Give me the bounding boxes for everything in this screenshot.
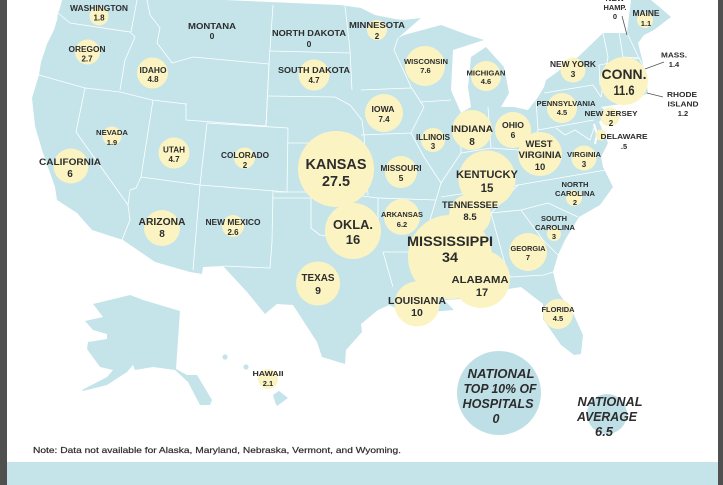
state: Indiana bbox=[451, 110, 493, 150]
state: Minnesota: 2 bbox=[375, 32, 380, 41]
state: Mississippi label: MISSISSIPPI bbox=[407, 234, 493, 249]
state: Virginia: VIRGINIA bbox=[567, 150, 602, 159]
callout: national average: AVERAGE bbox=[576, 410, 638, 424]
state: Washington bbox=[70, 4, 128, 26]
state: Oregon: OREGON bbox=[68, 45, 106, 54]
state: Virginia bbox=[567, 146, 602, 170]
state: New York: NEW YORK bbox=[550, 59, 597, 69]
state: Minnesota: MINNESOTA bbox=[349, 21, 405, 30]
bubble: Kentucky bbox=[458, 150, 516, 208]
state: Arizona: ARIZONA bbox=[138, 217, 186, 228]
state: North Carolina bbox=[555, 180, 596, 207]
state: Indiana: INDIANA bbox=[451, 124, 493, 135]
state: Georgia bbox=[509, 233, 547, 271]
state: Rhode Island with leader line bbox=[647, 90, 699, 118]
state: Utah: 4.7 bbox=[168, 155, 180, 164]
state: Texas bbox=[296, 262, 340, 306]
state: Colorado bbox=[221, 148, 269, 170]
state: North Dakota: NORTH DAKOTA bbox=[272, 29, 346, 38]
state: Delaware bbox=[596, 130, 648, 151]
state: New York: 3 bbox=[571, 69, 576, 79]
state: Arkansas: ARKANSAS bbox=[381, 210, 423, 219]
state: Florida: FLORIDA bbox=[542, 305, 575, 314]
state: Kentucky label: 15 bbox=[481, 183, 494, 195]
bubble: Oklahoma bbox=[325, 203, 381, 259]
map of Hawaii bbox=[222, 354, 288, 406]
state: Arkansas: 6.2 bbox=[397, 220, 407, 229]
state: Rhode Island with leader line: 1.2 bbox=[678, 109, 688, 118]
state: New Hampshire with leader line: 0 bbox=[613, 12, 617, 21]
state: California bbox=[39, 148, 101, 184]
state: Arkansas bbox=[381, 199, 423, 235]
state: Nevada: 1.9 bbox=[107, 138, 117, 147]
state: Florida bbox=[542, 299, 575, 329]
state: West Virginia bbox=[518, 132, 562, 176]
callout: national top 10% of hospitals bbox=[457, 351, 541, 435]
state: Washington: WASHINGTON bbox=[70, 4, 128, 13]
state: Minnesota bbox=[349, 20, 405, 41]
state: Tennessee label bbox=[442, 200, 498, 223]
bubble: Mississippi bbox=[408, 215, 492, 299]
callout: national average bbox=[576, 394, 642, 439]
map of the contiguous United States bbox=[32, 0, 671, 364]
state: North Dakota bbox=[272, 29, 346, 49]
state: West Virginia: 10 bbox=[535, 162, 545, 173]
state: Kansas label: 27.5 bbox=[322, 173, 350, 190]
state: Kentucky label bbox=[456, 169, 519, 195]
state: Connecticut bbox=[600, 57, 648, 105]
state: Ohio: 6 bbox=[511, 130, 516, 140]
state: Ohio bbox=[495, 112, 531, 148]
state: Pennsylvania: PENNSYLVANIA bbox=[536, 99, 596, 108]
state: Georgia: 7 bbox=[526, 253, 530, 262]
state: Colorado: 2 bbox=[243, 161, 248, 170]
state: Maine: 1.1 bbox=[641, 19, 651, 28]
state: Hawaii: 2.1 bbox=[263, 379, 273, 388]
state: Kansas label: KANSAS bbox=[306, 156, 366, 173]
state: North Carolina: NORTH bbox=[562, 180, 588, 189]
state: Idaho: IDAHO bbox=[140, 66, 166, 75]
state: Connecticut: CONN. bbox=[602, 66, 646, 82]
state: New Mexico: NEW MEXICO bbox=[206, 218, 260, 227]
state: California: CALIFORNIA bbox=[39, 157, 101, 168]
state: North Dakota: 0 bbox=[307, 39, 312, 49]
state: Alabama label: ALABAMA bbox=[452, 274, 509, 286]
state: Louisiana label: 10 bbox=[411, 307, 423, 319]
state: Tennessee label: 8.5 bbox=[463, 212, 477, 223]
state: Idaho: 4.8 bbox=[147, 75, 159, 84]
state: Nevada bbox=[96, 126, 129, 147]
state: Texas: 9 bbox=[315, 285, 321, 297]
state: South Carolina: CAROLINA bbox=[535, 223, 576, 232]
state: Rhode Island with leader line: RHODE bbox=[667, 90, 697, 99]
state: Arizona: 8 bbox=[159, 229, 165, 240]
callout: national top 10% of hospitals: NATIONAL bbox=[468, 367, 534, 381]
map of Alaska bbox=[82, 295, 212, 405]
state: New Hampshire with leader line bbox=[604, 0, 627, 35]
state: Louisiana label: LOUISIANA bbox=[388, 296, 446, 307]
state: Ohio: OHIO bbox=[502, 121, 524, 130]
state: Montana: 0 bbox=[210, 31, 215, 41]
state: South Carolina: SOUTH bbox=[541, 214, 567, 223]
state: Wisconsin: 7.6 bbox=[420, 66, 431, 75]
state: Massachusetts with leader line: MASS. bbox=[661, 50, 687, 60]
state: Indiana: 8 bbox=[469, 137, 475, 148]
state: Alabama label bbox=[452, 274, 509, 299]
state: Iowa bbox=[365, 94, 403, 132]
state: Hawaii: HAWAII bbox=[252, 369, 284, 378]
state: Idaho bbox=[137, 58, 168, 88]
state: Oklahoma label: 16 bbox=[346, 232, 360, 247]
bubble: Alabama bbox=[452, 250, 510, 308]
state: Maine bbox=[632, 9, 660, 28]
bubble: Louisiana bbox=[394, 282, 440, 326]
state: Missouri: 5 bbox=[399, 173, 404, 183]
state: Iowa: 7.4 bbox=[378, 115, 390, 124]
state: Delaware: DELAWARE bbox=[600, 132, 648, 141]
state: Connecticut: 11.6 bbox=[614, 82, 635, 98]
state: Utah: UTAH bbox=[163, 146, 185, 154]
state: New Jersey: NEW JERSEY bbox=[584, 109, 638, 118]
state: Mississippi label bbox=[407, 234, 493, 265]
state: Oregon bbox=[68, 40, 106, 64]
state: Colorado: COLORADO bbox=[221, 151, 269, 160]
state: Wisconsin bbox=[404, 46, 448, 86]
state: Illinois bbox=[416, 128, 451, 152]
state: Illinois: ILLINOIS bbox=[416, 133, 451, 142]
state: South Carolina bbox=[535, 214, 576, 241]
state: Kansas label bbox=[306, 156, 366, 190]
state: California: 6 bbox=[67, 169, 73, 180]
state: North Carolina: 2 bbox=[573, 198, 577, 207]
bottom band bbox=[7, 462, 718, 485]
state: West Virginia: VIRGINIA bbox=[518, 150, 562, 160]
state: Nevada: NEVADA bbox=[96, 128, 129, 137]
state: Pennsylvania: 4.5 bbox=[557, 108, 567, 117]
state: South Dakota bbox=[278, 60, 350, 90]
state: West Virginia: WEST bbox=[526, 139, 553, 149]
state: South Carolina: 3 bbox=[552, 232, 556, 241]
left window edge bbox=[0, 0, 7, 485]
state: Massachusetts with leader line: 1.4 bbox=[669, 60, 680, 69]
state: Texas: TEXAS bbox=[302, 273, 335, 284]
state: Utah bbox=[158, 138, 190, 168]
state: Washington: 1.8 bbox=[93, 14, 105, 22]
callout: national top 10% of hospitals: TOP 10% OF bbox=[464, 382, 537, 396]
state: Florida: 4.5 bbox=[553, 314, 563, 323]
state: Michigan bbox=[466, 61, 506, 91]
state: Missouri bbox=[380, 156, 422, 188]
state: New Jersey: 2 bbox=[609, 119, 614, 128]
state: Montana: MONTANA bbox=[188, 22, 236, 31]
state: North Carolina: CAROLINA bbox=[555, 189, 596, 198]
state: Michigan: 4.6 bbox=[481, 77, 491, 86]
state: Massachusetts with leader line bbox=[645, 50, 687, 69]
state: Oklahoma label bbox=[333, 217, 373, 247]
state: Maine: MAINE bbox=[632, 9, 660, 18]
state: Wisconsin: WISCONSIN bbox=[404, 57, 448, 66]
state: New York bbox=[550, 58, 597, 82]
callout: national top 10% of hospitals: HOSPITALS bbox=[462, 397, 534, 411]
state: Kentucky label: KENTUCKY bbox=[456, 169, 519, 181]
state: Montana bbox=[188, 22, 236, 41]
state: Virginia: 3 bbox=[582, 160, 587, 169]
state: New Mexico bbox=[206, 215, 260, 237]
state: Oregon: 2.7 bbox=[81, 54, 93, 64]
state: South Dakota: SOUTH DAKOTA bbox=[278, 66, 350, 75]
state: Arizona bbox=[138, 210, 186, 246]
state: Louisiana label bbox=[388, 296, 446, 319]
state: Illinois: 3 bbox=[431, 142, 436, 151]
right window edge bbox=[718, 0, 723, 485]
state: Delaware: .5 bbox=[621, 142, 627, 151]
state: Michigan: MICHIGAN bbox=[466, 68, 506, 78]
state: Iowa: IOWA bbox=[372, 105, 395, 114]
note text: Note: Data not available for Alaska, Maryland, Nebraska, Vermont, and Wyoming. bbox=[33, 445, 401, 455]
state: Georgia: GEORGIA bbox=[510, 244, 546, 253]
callout: national average: NATIONAL bbox=[578, 395, 642, 409]
callout: national average: 6.5 bbox=[595, 425, 614, 439]
state: Pennsylvania bbox=[536, 93, 596, 123]
state: New Jersey bbox=[584, 108, 638, 128]
bubble: Tennessee bbox=[449, 194, 491, 236]
bubble: Kansas bbox=[298, 131, 374, 207]
state: New Hampshire with leader line: HAMP. bbox=[604, 3, 626, 12]
state: Missouri: MISSOURI bbox=[380, 164, 422, 173]
state: Alabama label: 17 bbox=[476, 287, 488, 299]
state: South Dakota: 4.7 bbox=[308, 76, 320, 85]
callout: national top 10% of hospitals: 0 bbox=[493, 412, 500, 426]
state: Oklahoma label: OKLA. bbox=[333, 217, 373, 232]
state: Tennessee label: TENNESSEE bbox=[442, 200, 498, 210]
state: Rhode Island with leader line: ISLAND bbox=[668, 100, 699, 108]
state: Hawaii bbox=[252, 369, 284, 389]
state: Mississippi label: 34 bbox=[442, 249, 458, 265]
state: New Mexico: 2.6 bbox=[227, 228, 239, 237]
